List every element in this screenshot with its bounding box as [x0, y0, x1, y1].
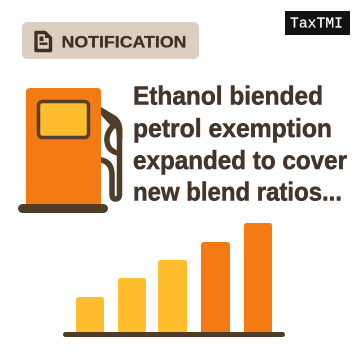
headline: expanded to cover	[133, 145, 347, 175]
pump screen	[38, 102, 88, 138]
bar 1	[76, 297, 104, 333]
headline: petrol exemption	[133, 113, 332, 143]
headline	[133, 80, 347, 206]
badge label: NOTIFICATION	[62, 32, 186, 52]
icon: fuel pump	[18, 88, 122, 213]
notification badge	[22, 22, 199, 59]
headline: new blend ratios...	[133, 176, 342, 206]
bar chart	[63, 223, 285, 337]
bar 4	[201, 242, 230, 333]
baseline	[63, 332, 285, 337]
pump nozzle loop	[107, 125, 118, 153]
headline: Ethanol biended	[133, 80, 323, 110]
pump hose	[101, 111, 120, 199]
pump body	[26, 88, 101, 206]
icon: document	[36, 32, 51, 50]
watermark: TaxTMI: TaxTMI	[290, 16, 343, 32]
bar 5	[244, 223, 272, 333]
bar 2	[118, 278, 146, 333]
pump base	[18, 204, 108, 213]
pump nozzle	[101, 107, 122, 139]
bar 3	[158, 260, 187, 333]
watermark: TaxTMI	[285, 11, 350, 35]
